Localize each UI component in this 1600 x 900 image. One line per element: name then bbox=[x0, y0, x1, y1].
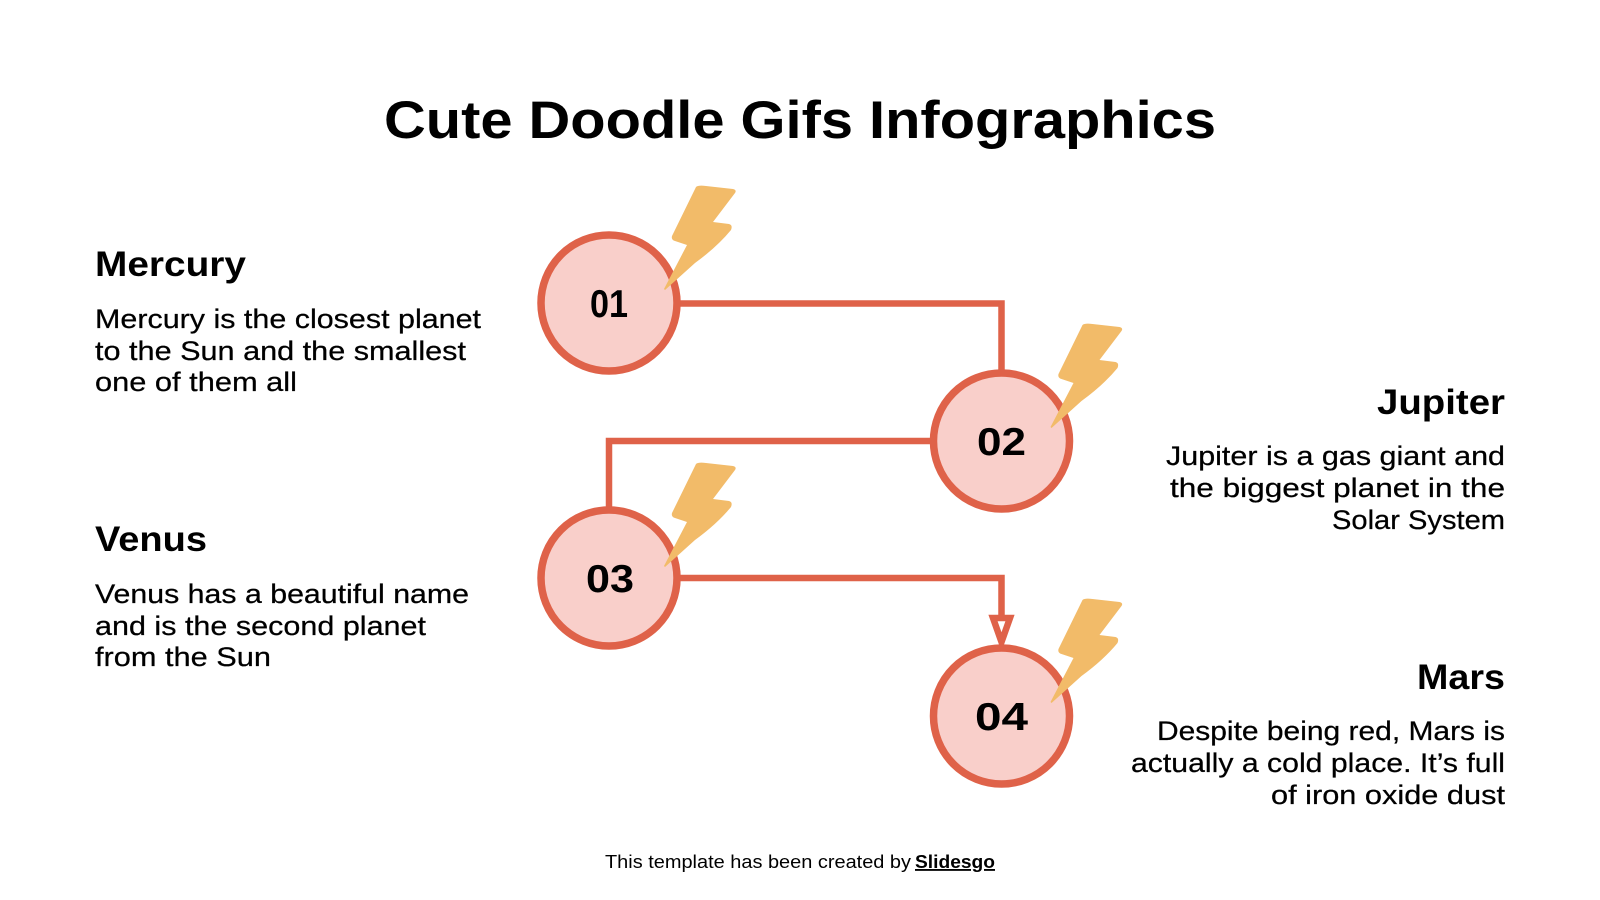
footer credit: Slidesgo bbox=[915, 851, 995, 872]
body: Mars: actually a cold place. It’s full bbox=[1131, 748, 1505, 778]
heading: Mars: Mars bbox=[1417, 658, 1505, 697]
node 02 bbox=[934, 324, 1122, 509]
body: Venus: from the Sun bbox=[95, 642, 271, 672]
body: Mars: Despite being red, Mars is bbox=[1157, 716, 1505, 746]
number 02: 02 bbox=[977, 421, 1026, 464]
body: Mars bbox=[1131, 716, 1506, 810]
node 04 bbox=[934, 599, 1122, 784]
node 03 bbox=[541, 463, 736, 646]
body: Mercury: Mercury is the closest planet bbox=[95, 304, 482, 334]
body: Venus: and is the second planet bbox=[95, 611, 427, 641]
body: Mercury: to the Sun and the smallest bbox=[95, 336, 467, 366]
body: Jupiter: Jupiter is a gas giant and bbox=[1166, 441, 1505, 471]
heading: Jupiter: Jupiter bbox=[1377, 383, 1505, 422]
connector: 02 to 03 bbox=[609, 441, 932, 510]
body: Venus: Venus has a beautiful name bbox=[95, 579, 469, 609]
heading: Venus: Venus bbox=[95, 520, 207, 559]
text block: Mercury bbox=[95, 245, 482, 397]
text block: Venus bbox=[95, 520, 469, 672]
icon: lightning bolt 04 bbox=[1050, 599, 1122, 703]
icon: lightning bolt 03 bbox=[664, 463, 736, 567]
body: Venus bbox=[95, 579, 469, 672]
number 01: 01 bbox=[590, 283, 628, 326]
body: Mercury bbox=[95, 304, 482, 397]
title: Cute Doodle Gifs Infographics bbox=[384, 91, 1216, 150]
body: Jupiter: the biggest planet in the bbox=[1170, 473, 1505, 503]
text block: Mars bbox=[1131, 658, 1506, 810]
body: Mars: of iron oxide dust bbox=[1271, 780, 1506, 810]
node 01 bbox=[541, 186, 736, 371]
heading: Mercury: Mercury bbox=[95, 245, 247, 284]
footer credit: This template has been created by bbox=[605, 851, 912, 872]
icon: lightning bolt 01 bbox=[664, 186, 736, 290]
connector arrow: 03 to 04 bbox=[680, 578, 1010, 642]
number 03: 03 bbox=[586, 558, 634, 601]
body: Jupiter: Solar System bbox=[1332, 505, 1505, 535]
connector: 01 to 02 bbox=[680, 304, 1002, 372]
text block: Jupiter bbox=[1166, 383, 1505, 535]
icon: lightning bolt 02 bbox=[1050, 324, 1122, 428]
number 04: 04 bbox=[975, 696, 1028, 739]
body: Mercury: one of them all bbox=[95, 367, 297, 397]
body: Jupiter bbox=[1166, 441, 1505, 535]
